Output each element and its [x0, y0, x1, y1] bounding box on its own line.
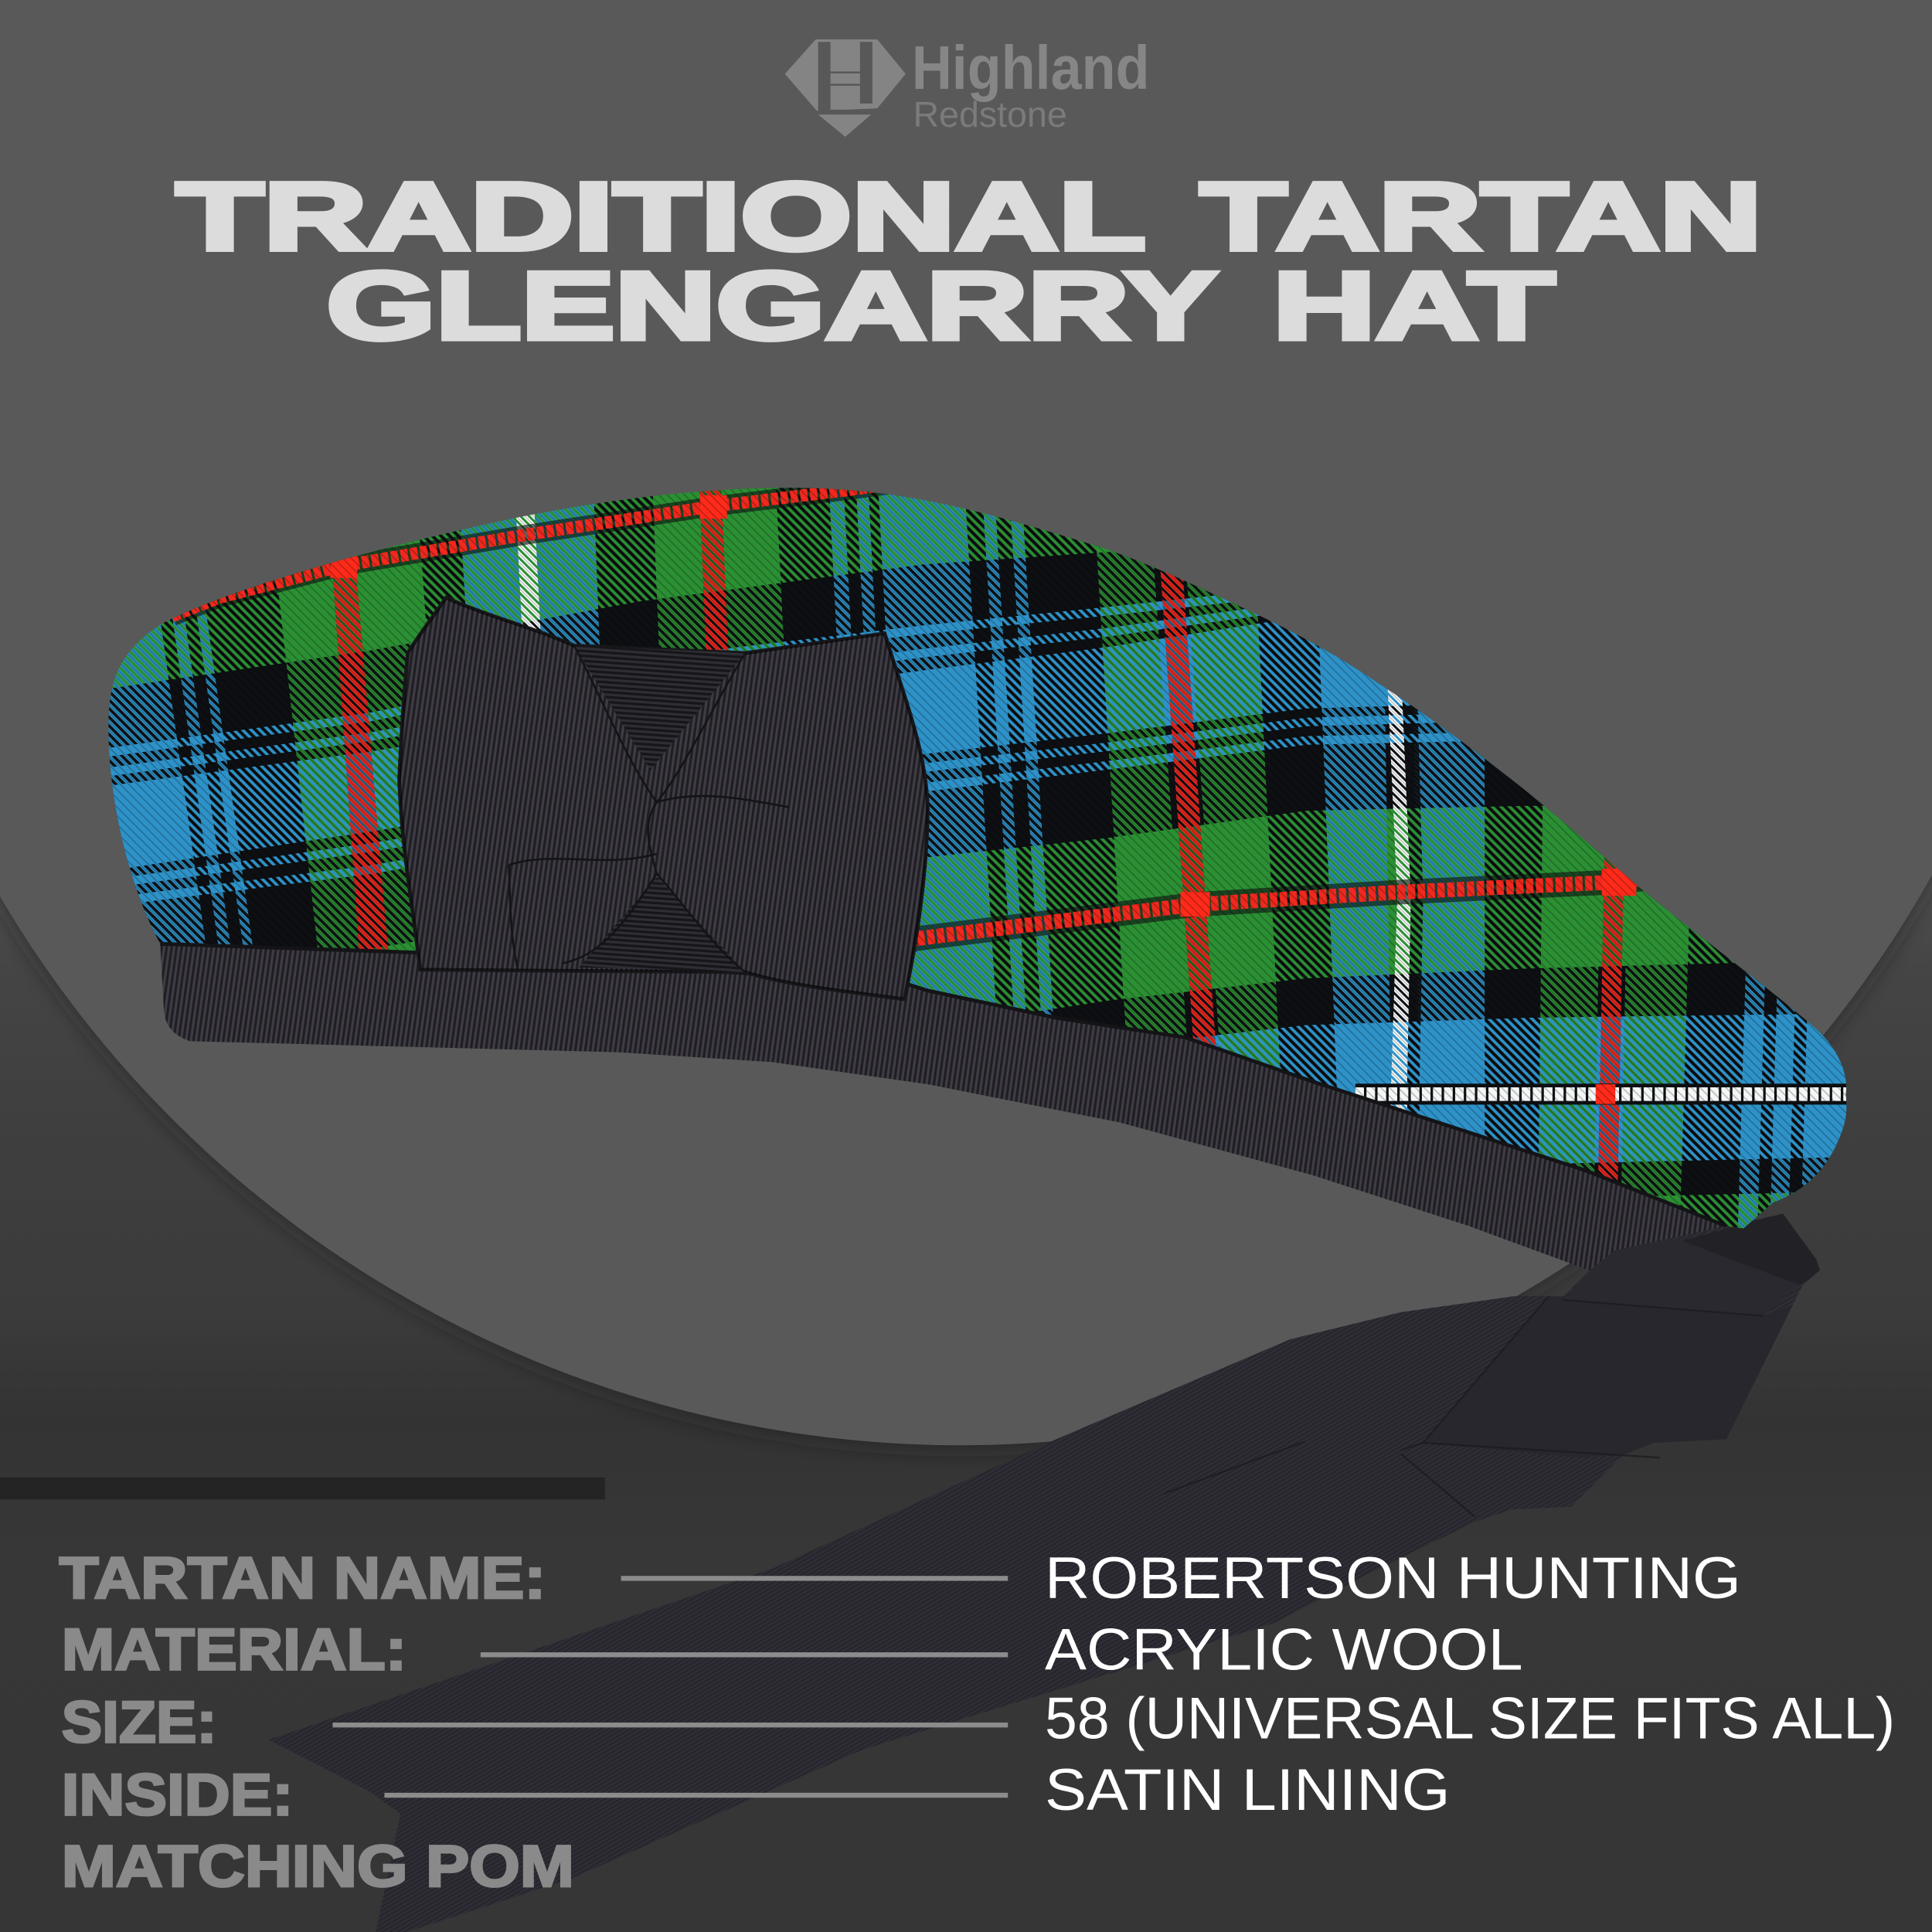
tartan upper red line: [172, 478, 937, 616]
label: INSIDE:: [62, 1763, 293, 1828]
value: SATIN LINING: [1045, 1757, 1451, 1823]
tartan vertical black stripes: [139, 468, 1824, 1244]
twill weave texture: [108, 488, 1847, 1227]
connector: [384, 1793, 1008, 1798]
spec row: size: [62, 1686, 1895, 1755]
bow fold lines: [509, 645, 788, 972]
hat tartan crown: [108, 488, 1847, 1229]
ribbon bow: [400, 597, 928, 999]
tartan base green: [108, 488, 1272, 782]
connector: [621, 1576, 1008, 1581]
ribbon knot folds: [1165, 1213, 1820, 1517]
bow rib texture: [400, 597, 928, 999]
tartan vertical green stripes: [283, 488, 1688, 1196]
tartan lower red line: [900, 877, 1657, 946]
spec row: material: [62, 1617, 1523, 1682]
label: TARTAN NAME:: [60, 1546, 546, 1611]
circle backdrop: [0, 0, 1932, 1445]
bow top pleat: [574, 645, 746, 770]
title word TARTAN: TARTAN: [1200, 163, 1762, 270]
spec row: inside: [62, 1757, 1451, 1828]
hat band: [160, 944, 1726, 1270]
title word GLENGARRY: GLENGARRY: [327, 252, 1217, 359]
title: [176, 163, 1762, 359]
value: ACRYLIC WOOL: [1045, 1617, 1523, 1682]
title word HAT: HAT: [1273, 252, 1555, 359]
label: SIZE:: [62, 1689, 217, 1755]
bow body: [400, 597, 928, 999]
logo wordmark Highland: Highland: [912, 33, 1150, 102]
tartan horizontal rows: [108, 552, 1847, 1229]
tartan vertical red stripes: [332, 490, 1624, 1181]
value: 58 (UNIVERSAL SIZE FITS ALL): [1045, 1686, 1895, 1752]
circle backdrop shadow: [0, 0, 1932, 1449]
bow bottom pleat: [579, 877, 746, 972]
long ribbon tail: [269, 1213, 1820, 1932]
logo: Highland Redstone: [785, 33, 1150, 137]
value: ROBERTSON HUNTING: [1045, 1546, 1741, 1611]
spec row: matching pom: MATCHING POM: [62, 1834, 574, 1900]
connector: [481, 1652, 1008, 1657]
tartan vertical white stripes: [516, 515, 1411, 1110]
connector: [332, 1723, 1008, 1727]
label: MATERIAL:: [62, 1617, 406, 1682]
logo diamond mark: [785, 39, 906, 137]
tartan vertical blue stripes: [108, 488, 1847, 1229]
logo wordmark Redstone: Redstone: [913, 94, 1067, 134]
spec row: tartan name: [60, 1546, 1741, 1611]
hat band top edge: [160, 944, 1726, 1226]
hat ribbon tails: [269, 1213, 1820, 1932]
dark accent bar: [0, 1478, 605, 1499]
tartan red crossing points: [330, 495, 1636, 1104]
title word TRADITIONAL: TRADITIONAL: [176, 163, 1146, 270]
tartan white line: [1355, 1087, 1855, 1100]
